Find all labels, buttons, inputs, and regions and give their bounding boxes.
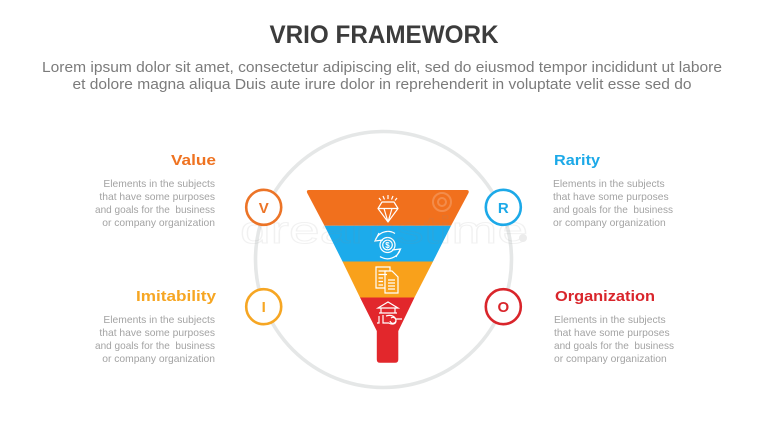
subtitle xyxy=(42,60,722,93)
text block: Imitability xyxy=(95,289,216,365)
text block: Imitability: that have some purposes xyxy=(99,328,215,339)
icon: dollar cycle: $ xyxy=(385,241,390,250)
icon: diamond xyxy=(378,195,398,222)
funnel band: rarity xyxy=(324,226,451,262)
text block: Organization: or company organization xyxy=(554,354,667,365)
text block: Rarity: Elements in the subjects xyxy=(553,179,665,190)
icon: documents xyxy=(376,267,398,293)
text block: Imitability: Imitability xyxy=(136,289,216,305)
badge: I: I xyxy=(262,299,266,316)
watermark: dreamstime xyxy=(240,210,528,252)
funnel band: imitability xyxy=(342,262,433,298)
text block: Organization: that have some purposes xyxy=(554,328,670,339)
text block: Organization: and goals for the business xyxy=(554,341,674,352)
funnel band: value xyxy=(307,190,469,226)
background ring xyxy=(256,132,512,388)
subtitle: et dolore magna aliqua Duis aute irure dolor in reprehenderit in voluptate velit esse sed do xyxy=(72,77,692,93)
text block: Organization: Elements in the subjects xyxy=(554,315,666,326)
title: VRIO FRAMEWORK xyxy=(270,21,498,49)
badge: R xyxy=(486,190,521,225)
text block: Value: or company organization xyxy=(102,218,215,229)
text block: Imitability: or company organization xyxy=(102,354,215,365)
badge: O: O xyxy=(497,299,509,316)
text block: Value xyxy=(95,153,216,229)
text block: Imitability: and goals for the business xyxy=(95,341,215,352)
badge: O xyxy=(486,289,521,324)
badge: R: R xyxy=(498,200,509,217)
badge: I xyxy=(246,289,281,324)
text block: Rarity: or company organization xyxy=(553,218,666,229)
text block: Imitability: Elements in the subjects xyxy=(103,315,215,326)
badge: V: V xyxy=(259,200,269,217)
icon: maze and building xyxy=(377,302,402,324)
funnel band: organization xyxy=(360,298,414,363)
text block: Rarity: that have some purposes xyxy=(553,192,669,203)
text block: Rarity xyxy=(553,153,673,229)
text block: Value: and goals for the business xyxy=(95,205,215,216)
subtitle: Lorem ipsum dolor sit amet, consectetur adipiscing elit, sed do eiusmod tempor incididunt ut labore xyxy=(42,60,722,76)
text block: Value: that have some purposes xyxy=(99,192,215,203)
text block: Rarity: and goals for the business xyxy=(553,205,673,216)
text block: Value: Elements in the subjects xyxy=(103,179,215,190)
text block: Value: Value xyxy=(171,153,216,169)
watermark xyxy=(240,193,528,252)
badge: V xyxy=(246,190,281,225)
funnel xyxy=(307,190,469,363)
text block: Rarity: Rarity xyxy=(554,153,600,169)
text block: Organization: Organization xyxy=(555,289,655,305)
text block: Organization xyxy=(554,289,674,365)
icon: dollar cycle xyxy=(375,231,400,259)
